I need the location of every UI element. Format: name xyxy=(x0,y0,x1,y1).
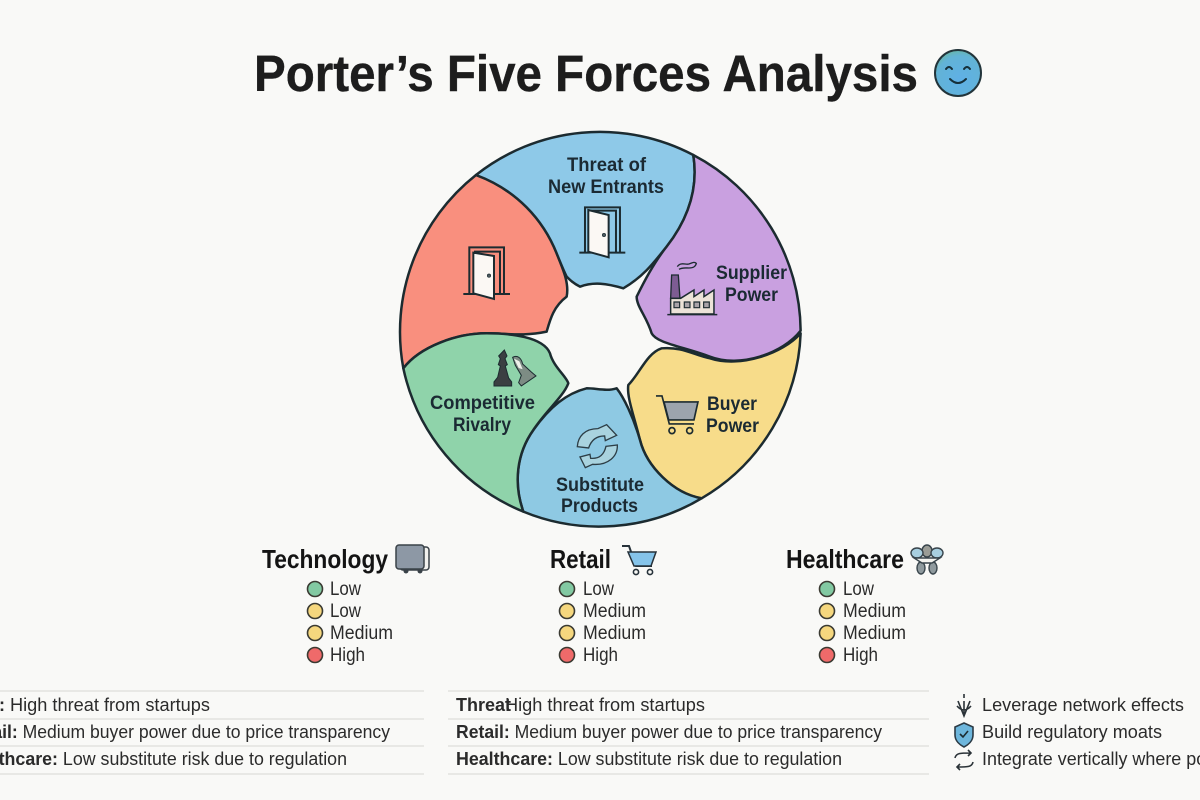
wedge shapes xyxy=(400,132,801,527)
icon: healthcare emblem xyxy=(911,545,943,574)
rating list xyxy=(560,579,646,666)
icon: cart xyxy=(622,546,656,575)
title: Porter’s Five Forces Analysis xyxy=(254,45,918,102)
heading: technology: Technology xyxy=(262,544,388,574)
list: strategy recommendations xyxy=(955,694,1200,770)
rating list: Medium xyxy=(843,601,906,622)
label: substitute products: Products xyxy=(561,496,638,517)
table: middle findings: Retail: Medium buyer power due to price transparency xyxy=(456,722,882,742)
label: buyer power: Power xyxy=(706,416,760,437)
five forces wheel xyxy=(400,132,801,527)
heading: healthcare: Healthcare xyxy=(786,544,904,574)
icon: door in new entrants wedge xyxy=(579,207,625,257)
rating list: High xyxy=(583,645,618,666)
panel: technology ratings xyxy=(262,544,429,666)
rating list xyxy=(308,579,393,666)
rating list: Medium xyxy=(330,623,393,644)
rating list: Low xyxy=(330,579,361,600)
label: buyer power xyxy=(706,394,760,437)
text: leverage network effects: Leverage network effects xyxy=(982,695,1184,715)
icon: factory xyxy=(667,262,717,315)
label: threat of new entrants: Threat of xyxy=(567,155,647,176)
icon: integrate arrows xyxy=(955,750,973,770)
label: substitute products: Substitute xyxy=(556,475,644,496)
icon: shield xyxy=(955,723,973,747)
wedge: red xyxy=(400,175,567,368)
label: competitive rivalry: Rivalry xyxy=(453,415,511,436)
label: threat of new entrants xyxy=(548,155,664,198)
label: threat of new entrants: New Entrants xyxy=(548,177,664,198)
table: middle findings: Healthcare: Low substitute risk due to regulation xyxy=(456,749,842,769)
label: buyer power: Buyer xyxy=(707,394,758,415)
rating list: Low xyxy=(330,601,361,622)
wedge: supplier power xyxy=(637,155,801,361)
label: supplier power: Power xyxy=(725,285,779,306)
text: build regulatory moats: Build regulatory moats xyxy=(982,722,1162,742)
rating list: Medium xyxy=(583,623,646,644)
wedge: competitive rivalry xyxy=(403,333,568,512)
rating list xyxy=(820,579,906,666)
rating list: Medium xyxy=(583,601,646,622)
icon: chess pieces xyxy=(494,350,536,386)
table: middle findings xyxy=(448,691,929,774)
rating list: Low xyxy=(583,579,614,600)
icon: shopping cart in buyer wedge xyxy=(656,396,698,434)
label: supplier power: Supplier xyxy=(716,263,788,284)
heading: retail: Retail xyxy=(550,544,611,574)
icon: substitution arrows xyxy=(577,425,617,468)
table: left findings, clipped by the page edge: High threat from startups xyxy=(10,695,210,715)
table: middle findings: Threat xyxy=(456,695,511,715)
panel: retail ratings xyxy=(550,544,656,666)
rating list: Low xyxy=(843,579,874,600)
label: supplier power xyxy=(716,263,788,306)
wedge: threat of new entrants xyxy=(476,132,695,288)
wedge: substitute products xyxy=(518,388,702,527)
panel: healthcare ratings xyxy=(786,544,943,666)
rating list: High xyxy=(330,645,365,666)
table: left findings, clipped by the page edge xyxy=(0,691,424,774)
rating list: Medium xyxy=(843,623,906,644)
rating list: High xyxy=(843,645,878,666)
label: competitive rivalry xyxy=(430,393,535,436)
wedge: buyer power xyxy=(628,333,801,498)
table: middle findings: High threat from startups xyxy=(505,695,705,715)
icon: devices xyxy=(396,545,429,574)
icon: smiling globe xyxy=(935,50,981,96)
label: substitute products xyxy=(556,475,644,517)
icon: network antenna xyxy=(957,694,971,716)
label: competitive rivalry: Competitive xyxy=(430,393,535,414)
icon: door in red wedge xyxy=(463,247,510,299)
